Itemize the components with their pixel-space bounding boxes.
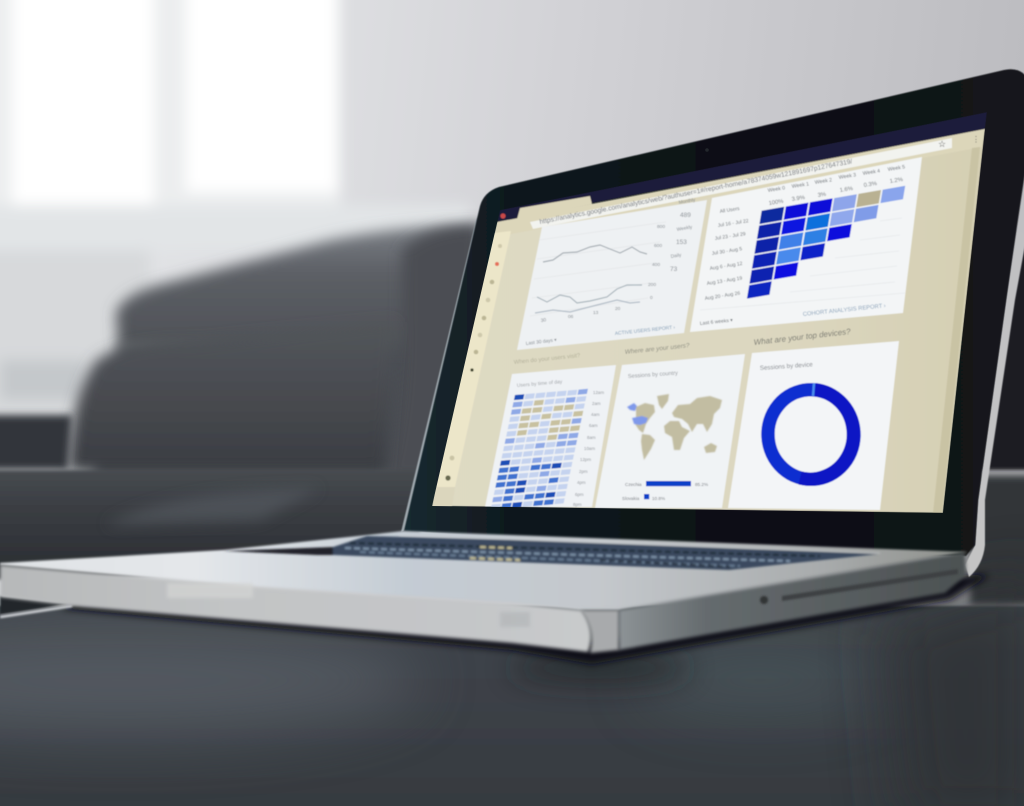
chart: axis and legend labels: 600: [654, 243, 662, 249]
table: cohort date labels: Aug 20 - Aug 26: [704, 290, 741, 302]
panel: users by time of day: [485, 365, 616, 510]
chart: axis and legend labels: 06: [568, 314, 574, 320]
chart: axis and legend labels: Daily: [670, 252, 682, 260]
sofa: right arm: [980, 230, 1024, 470]
screen: address bar: [530, 138, 952, 229]
laptop base: corner: [580, 610, 619, 653]
heatmap: hour labels: 6pm: [575, 492, 584, 497]
bezel: side reflection: [949, 307, 963, 405]
chart: axis and legend labels: 800: [657, 224, 665, 230]
sofa: front seat cushion highlight: [105, 488, 320, 525]
tabletop: right side shade: [880, 570, 1024, 806]
map: South America: [641, 434, 655, 460]
chart: axis and legend labels: Last 30 days ▾: [526, 337, 558, 347]
map: Australia: [704, 443, 717, 453]
chart: axis and legend labels: 73: [670, 266, 678, 273]
chart: axis and legend labels: 400: [652, 262, 660, 268]
heatmap: hour labels: 6am: [589, 423, 598, 428]
chart: country bars: 85.2%: [695, 482, 708, 487]
chart: axis and legend labels: 200: [648, 282, 656, 288]
sofa: dark left side: [0, 415, 72, 470]
laptop lid: black bezel: [404, 69, 1024, 556]
sofa: upper back cushion: [116, 225, 490, 350]
heading: where are your users: Where are your users?: [624, 342, 690, 356]
map: Africa: [664, 421, 690, 450]
table: week headers: Week 2: [814, 177, 833, 186]
chart: axis and legend labels: 13: [593, 310, 599, 316]
icon: active sidebar item: [495, 262, 499, 266]
tabletop: teal reflection: [640, 650, 880, 710]
screen: browser toolbar: [495, 129, 985, 237]
link: cohort analysis report: COHORT ANALYSIS REPORT ›: [803, 303, 886, 318]
heatmap: hour labels: 8pm: [573, 502, 582, 507]
sofa: side arm cushion: [385, 225, 480, 480]
table: cohort date labels: Jul 16 - Jul 22: [717, 218, 749, 229]
table: week headers: Week 3: [838, 172, 857, 181]
table: cohort date labels: Aug 13 - Aug 19: [706, 275, 743, 287]
label: users by time of day: Users by time of day: [517, 379, 563, 389]
screen: [432, 112, 987, 513]
table: cohort date labels: All Users: [719, 206, 741, 215]
table: cohort date labels: [700, 206, 749, 327]
screen: url text: https://analytics.google.com/analytics/web/?authuser=1#/report-home/a78374059w121891697p127647319/: [539, 158, 853, 226]
table: week headers: 1.2%: [889, 177, 903, 185]
laptop lid: silver rim: [965, 168, 1024, 577]
heatmap: time of day: [491, 389, 588, 510]
sofa: backing behind cushions: [90, 300, 480, 480]
map: Canada and Mexico: [635, 403, 655, 433]
sofa: lower back cushion: [68, 322, 395, 472]
screen: browser tab: [517, 196, 592, 219]
shadow under laptop: [60, 575, 990, 664]
panel: active users: [517, 197, 707, 350]
label: sessions by device: Sessions by device: [760, 361, 814, 372]
table: cohort date labels: Last 6 weeks ▾: [700, 318, 734, 327]
table: cohort date labels: Jul 23 - Jul 29: [714, 231, 746, 242]
laptop: [0, 69, 1024, 653]
heatmap: hour labels: 4pm: [577, 480, 586, 485]
link: active users report: ACTIVE USERS REPORT ›: [615, 325, 676, 337]
map: Alaska: [627, 403, 637, 411]
panel: sessions by device: [728, 341, 899, 510]
table: week headers: 100%: [768, 199, 784, 207]
heatmap: hour labels: 2pm: [579, 469, 588, 474]
line chart: users over time: [535, 245, 647, 313]
icon: browser menu: ⋮: [972, 135, 980, 144]
heatmap: hour labels: 2am: [592, 401, 601, 406]
laptop base: front latch: [500, 612, 530, 627]
heatmap: hour labels: 12pm: [580, 457, 591, 462]
laptop base: side ports: [760, 569, 958, 604]
label: sessions by country: Sessions by country: [628, 371, 678, 380]
tabletop surface: [0, 606, 1024, 806]
panel: sessions by country: [595, 354, 745, 508]
map: Greenland: [657, 394, 669, 409]
table: week headers: 1.6%: [839, 186, 853, 194]
chart: country bars: Slovakia: [622, 496, 640, 501]
laptop base: side with ports: [619, 552, 966, 650]
object under laptop: tablet edge: [0, 596, 72, 617]
heading: what are your top devices: What are your top devices?: [753, 327, 852, 347]
laptop base: rear label: [167, 583, 253, 598]
screen: browser tab bar: [497, 112, 987, 224]
heatmap: hour labels: 10am: [584, 446, 595, 451]
table: week headers: Week 5: [887, 164, 906, 173]
heatmap: hour labels: 4am: [591, 412, 600, 417]
screen: sidebar: [432, 231, 511, 507]
heatmap: hour labels: 8am: [587, 435, 596, 440]
heatmap: cohort retention: [747, 186, 905, 299]
chart: axis and legend labels: Monthly: [678, 197, 696, 206]
map: United States: [632, 416, 648, 425]
table: week headers: [767, 164, 906, 207]
icon: browser logo: [500, 213, 506, 219]
icon: webcam: [705, 148, 709, 152]
table: week headers: 3.9%: [791, 195, 805, 203]
heatmap: hour labels: 12am: [593, 390, 604, 395]
chart: country bars: 10.8%: [652, 496, 665, 501]
background: bright windows: [0, 0, 470, 420]
keyboard: [223, 535, 880, 570]
chart: axis and legend labels: 30: [540, 317, 547, 324]
tabletop: window reflection: [0, 625, 420, 735]
donut chart: devices: [765, 383, 857, 482]
chart: axis and legend labels: [526, 197, 696, 347]
chart: axis and legend labels: 489: [680, 212, 691, 219]
chart: axis and legend labels: Weekly: [676, 224, 693, 233]
table: cohort date labels: Aug 6 - Aug 12: [709, 261, 743, 272]
table: week headers: Week 0: [767, 185, 786, 194]
table: week headers: Week 4: [862, 168, 881, 177]
chart: country bars: Czechia: [625, 482, 642, 487]
laptop base: top deck: [0, 531, 968, 610]
heading: when do your users visit: When do your users visit?: [514, 353, 581, 366]
map: Eurasia: [672, 396, 722, 432]
chart: axis and legend labels: 0: [650, 295, 653, 301]
screen: right margin stripe: [933, 147, 980, 513]
sofa: seat: [0, 470, 420, 580]
panel: cohort analysis: [690, 157, 922, 332]
laptop base: front face: [0, 565, 591, 652]
laptop lid: left lit edge: [401, 215, 480, 532]
table: cohort date labels: Jul 30 - Aug 5: [711, 246, 743, 257]
chart: axis and legend labels: 20: [615, 306, 621, 312]
screen: beige dashboard background: [432, 129, 985, 513]
tabletop: soft shadow below laptop corner: [510, 652, 690, 684]
icon: star: ☆: [938, 139, 946, 149]
table: week headers: Week 1: [791, 181, 810, 190]
chart: country bars: [622, 481, 708, 501]
table: week headers: 3%: [817, 192, 827, 199]
table: week headers: 0.3%: [863, 181, 877, 189]
heatmap: hour labels: [573, 390, 604, 507]
background: sofa: [0, 225, 1024, 605]
map: world: [627, 394, 722, 460]
chart: axis and legend labels: 153: [676, 239, 687, 246]
